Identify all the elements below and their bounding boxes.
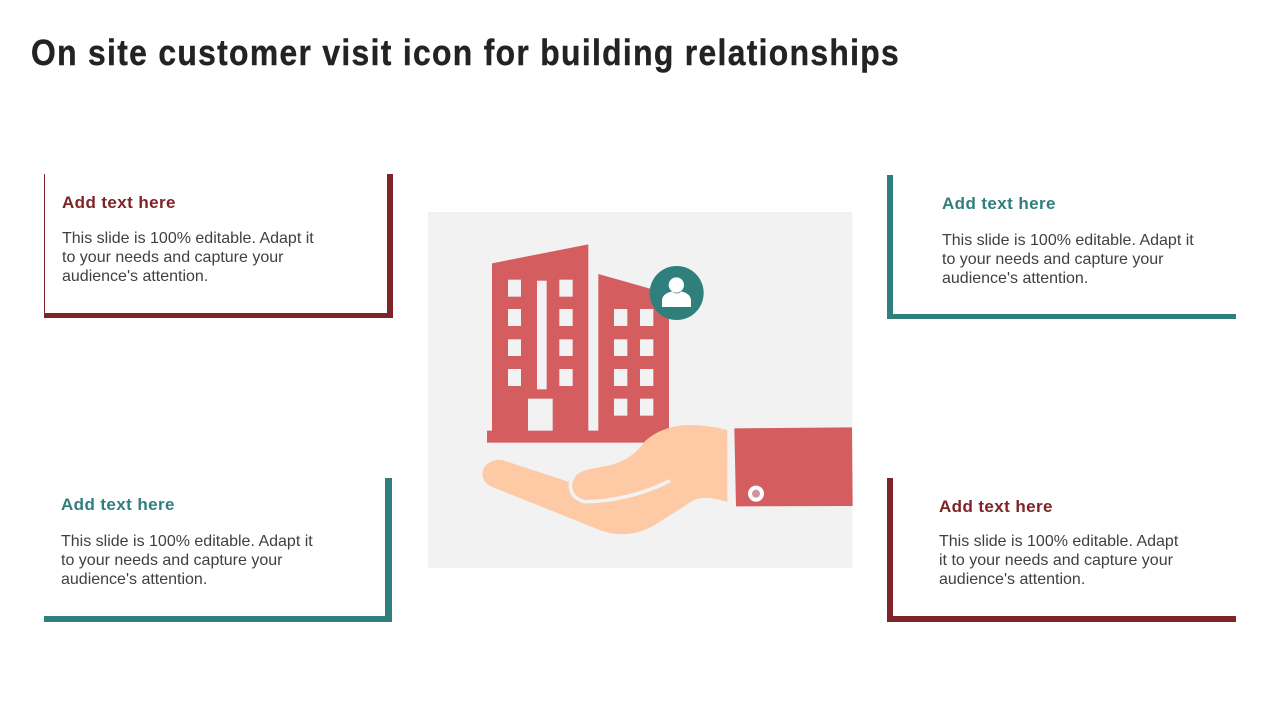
text block: top-left card: This slide is 100% editable. Adapt it — [62, 230, 314, 247]
icon: shirt cuff — [734, 427, 853, 506]
heading: top-right card: Add text here — [942, 194, 1056, 213]
text block: bottom-left card: audience's attention. — [61, 571, 207, 588]
title: On site customer visit icon for building relationships — [31, 32, 900, 73]
panel: bottom-right text card — [887, 478, 1236, 622]
text block: bottom-right card: This slide is 100% editable. Adapt — [939, 533, 1178, 550]
icon: open hand — [482, 425, 727, 534]
text block: top-left card: audience's attention. — [62, 268, 208, 285]
text block: top-right card: audience's attention. — [942, 270, 1088, 287]
text block: top-left card — [62, 230, 314, 285]
text block: top-left card: to your needs and capture your — [62, 249, 283, 266]
heading: top-left card: Add text here — [62, 193, 176, 212]
text block: bottom-right card — [939, 533, 1178, 588]
panel: bottom-left text card — [44, 478, 392, 622]
panel: top-right text card — [887, 175, 1236, 319]
text block: bottom-right card: it to your needs and capture your — [939, 552, 1173, 569]
text block: bottom-left card: This slide is 100% editable. Adapt it — [61, 533, 313, 550]
central illustration: hand holding building — [428, 212, 853, 568]
text block: top-right card: to your needs and capture your — [942, 251, 1163, 268]
heading: bottom-right card: Add text here — [939, 497, 1053, 516]
text block: top-right card: This slide is 100% editable. Adapt it — [942, 232, 1194, 249]
icon: building — [487, 244, 669, 443]
panel: illustration background — [428, 212, 852, 568]
text block: top-right card — [942, 232, 1194, 287]
panel: top-left text card — [44, 174, 393, 318]
text block: bottom-left card — [61, 533, 313, 588]
text block: bottom-left card: to your needs and capture your — [61, 552, 282, 569]
icon: customer badge — [650, 266, 704, 320]
heading: bottom-left card: Add text here — [61, 495, 175, 514]
text block: bottom-right card: audience's attention. — [939, 571, 1085, 588]
